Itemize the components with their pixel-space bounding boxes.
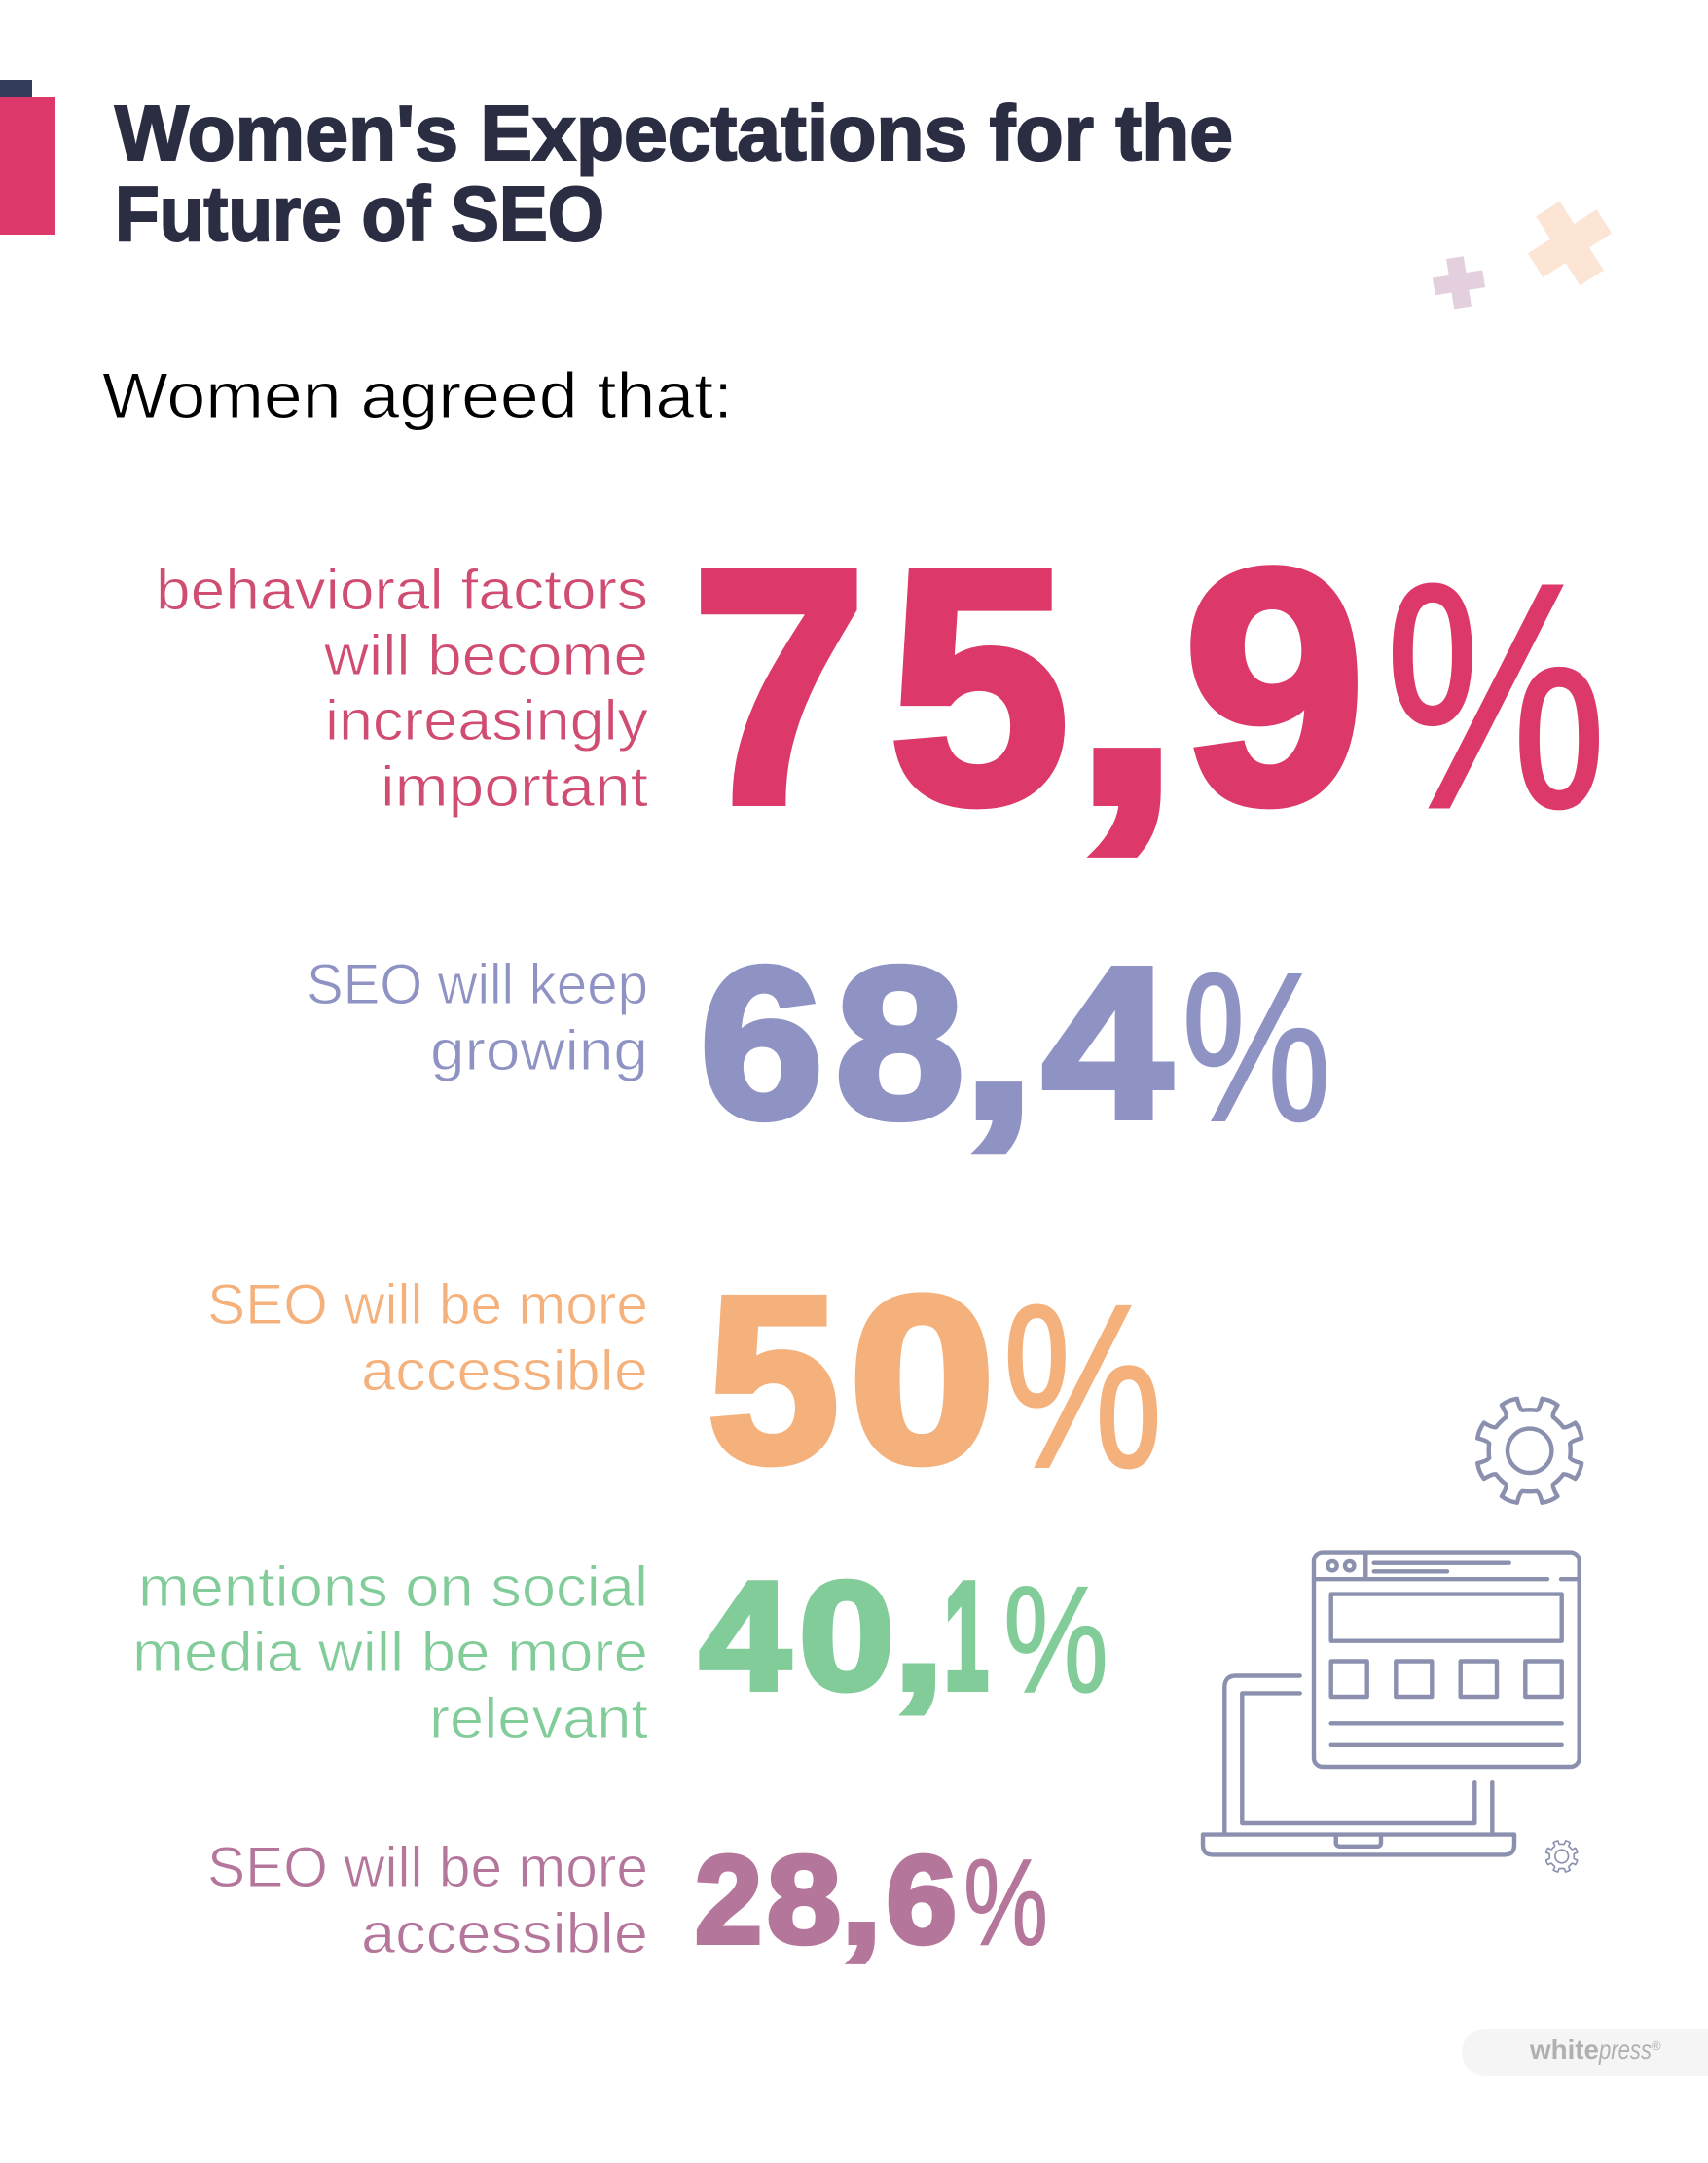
- stat label: behavioral factors: behavioral factors: [156, 559, 648, 622]
- stat value: 68,4%: 4: [1042, 923, 1172, 1162]
- stat value: 75,9%: ,: [1071, 500, 1182, 872]
- stat label: behavioral factors: [156, 559, 648, 819]
- stat value: 50%: [708, 1248, 1163, 1517]
- stat label: behavioral factors: will become: [323, 624, 648, 687]
- stat value: 75,9%: [691, 500, 1607, 875]
- stat label: SEO will keep growing: SEO will keep: [307, 953, 648, 1016]
- stat value: 40,1%: %: [1003, 1556, 1108, 1725]
- stat value: 28,6%: 6: [886, 1830, 957, 1970]
- stat value: 40,1%: 1: [944, 1551, 989, 1722]
- stat label: SEO will be more accessible: accessible: [361, 1339, 648, 1403]
- title: [115, 90, 1233, 257]
- logo: whitepress: [1462, 2029, 1708, 2076]
- stat value: 75,9%: 5: [889, 500, 1070, 872]
- corner accent blocks: [0, 80, 55, 235]
- stat value: 28,6%: 8: [767, 1830, 841, 1970]
- logo: whitepress: white: [1529, 2035, 1599, 2065]
- logo: whitepress: ®: [1652, 2038, 1661, 2053]
- icon: laptop: [1203, 1676, 1514, 1854]
- stat value: 68,4%: [700, 923, 1331, 1166]
- stat value: 40,1%: 0: [799, 1551, 894, 1722]
- stat value: 50%: 0: [849, 1248, 995, 1512]
- stat label: SEO will be more accessible (second): SEO will be more: [207, 1836, 648, 1899]
- stat value: 28,6%: %: [963, 1834, 1048, 1971]
- stat label: behavioral factors: increasingly: [325, 689, 648, 752]
- stat label: SEO will be more accessible (second): [207, 1836, 648, 1965]
- title: Future of SEO: [115, 170, 604, 257]
- decoration: mauve plus: [1430, 254, 1488, 312]
- title: Women's Expectations for the: [115, 90, 1233, 176]
- stat label: SEO will keep growing: [307, 953, 648, 1082]
- stat label: SEO will be more accessible: SEO will be more: [207, 1273, 648, 1337]
- icon: large gear: [1473, 1395, 1585, 1507]
- stat label: SEO will be more accessible (second): accessible: [361, 1902, 648, 1965]
- stat value: 28,6%: 2: [695, 1830, 762, 1970]
- stat value: 75,9%: 7: [691, 500, 866, 872]
- stat value: 50%: %: [1002, 1256, 1163, 1517]
- stat label: mentions on social media: mentions on social: [138, 1556, 648, 1619]
- stat value: 28,6%: [695, 1830, 1048, 1971]
- icon: browser window: [1314, 1553, 1580, 1767]
- stat value: 40,1%: [700, 1551, 1108, 1725]
- stat value: 68,4%: 6: [700, 923, 823, 1162]
- stat value: 68,4%: %: [1181, 930, 1331, 1166]
- stat value: 50%: 5: [708, 1248, 839, 1512]
- logo: whitepress: press: [1598, 2035, 1652, 2065]
- stat label: mentions on social media: media will be more: [132, 1621, 648, 1684]
- icon: small gear: [1544, 1840, 1579, 1873]
- stat value: 75,9%: %: [1385, 516, 1607, 875]
- stat label: SEO will be more accessible: [207, 1273, 648, 1403]
- decoration: peach cross: [1513, 187, 1626, 300]
- stat value: 68,4%: 8: [835, 923, 964, 1162]
- stat label: SEO will keep growing: growing: [430, 1019, 648, 1082]
- stat label: mentions on social media: [132, 1556, 648, 1750]
- stat label: behavioral factors: important: [381, 755, 648, 819]
- stat label: mentions on social media: relevant: [429, 1687, 648, 1750]
- subtitle: Women agreed that:: [102, 359, 733, 431]
- stat value: 68,4%: ,: [962, 923, 1036, 1162]
- stat value: 28,6%: ,: [841, 1830, 882, 1970]
- stat value: 40,1%: ,: [893, 1551, 944, 1722]
- stat value: 40,1%: 4: [700, 1551, 790, 1722]
- stat value: 75,9%: 9: [1183, 500, 1365, 872]
